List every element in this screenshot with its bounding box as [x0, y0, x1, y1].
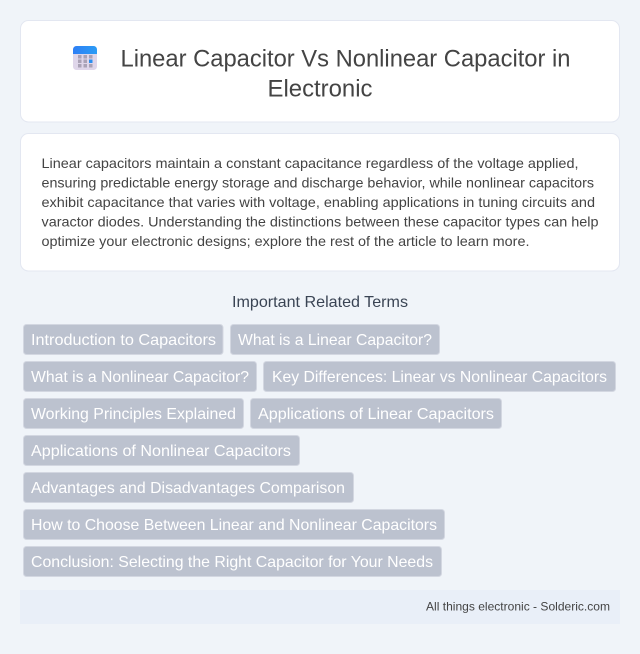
tag: linear applications: Applications of Linear Capacitors [258, 406, 494, 423]
panel: title header [20, 20, 620, 122]
tag: how to choose: How to Choose Between Linear and Nonlinear Capacitors [31, 517, 437, 534]
tag: conclusion [24, 546, 442, 576]
tag: introduction [24, 324, 223, 354]
tag: how to choose [24, 510, 444, 540]
tag: conclusion: Conclusion: Selecting the Right Capacitor for Your Needs [31, 554, 433, 571]
footer: All things electronic - Solderic.com [426, 600, 610, 614]
tag: nonlinear applications: Applications of Nonlinear Capacitors [31, 443, 291, 460]
title: Electronic [268, 76, 372, 102]
heading: important related terms: Important Related Terms [232, 294, 408, 311]
text block: summary paragraph: optimize your electronic designs; explore the rest of the article to learn more. [42, 233, 530, 249]
tag: advantages: Advantages and Disadvantages Comparison [31, 480, 345, 497]
title [120, 46, 570, 102]
tag: linear applications [250, 398, 502, 428]
tag: advantages [24, 472, 354, 502]
title: Linear Capacitor Vs Nonlinear Capacitor in [120, 46, 570, 72]
tag: linear capacitor [230, 324, 440, 354]
tag: working principles [24, 398, 244, 428]
tag: linear capacitor: What is a Linear Capacitor? [238, 332, 432, 349]
text block: summary paragraph: exhibit capacitance that varies with voltage, enabling applications in tuning circuits and [42, 194, 595, 210]
icon: calendar grid [73, 46, 97, 70]
tag: introduction: Introduction to Capacitors [31, 332, 216, 349]
tag: nonlinear capacitor: What is a Nonlinear Capacitor? [31, 369, 249, 386]
tag: nonlinear applications [24, 436, 300, 466]
footer [20, 590, 620, 624]
tag: key differences: Key Differences: Linear vs Nonlinear Capacitors [272, 369, 607, 386]
text block: summary paragraph: ensuring predictable energy storage and discharge behavior, while nonlinear capacitors [42, 174, 594, 190]
tag: working principles: Working Principles Explained [31, 406, 236, 423]
text block: summary paragraph [42, 155, 599, 249]
text block: summary paragraph: varactor diodes. Understanding the distinctions between these capacitor types can help [42, 214, 599, 230]
text block: summary paragraph: Linear capacitors maintain a constant capacitance regardless of the voltage applied, [42, 155, 578, 171]
tag: nonlinear capacitor [24, 362, 256, 392]
tag list [24, 324, 616, 576]
panel: intro summary [20, 134, 620, 271]
tag: key differences [264, 362, 616, 392]
